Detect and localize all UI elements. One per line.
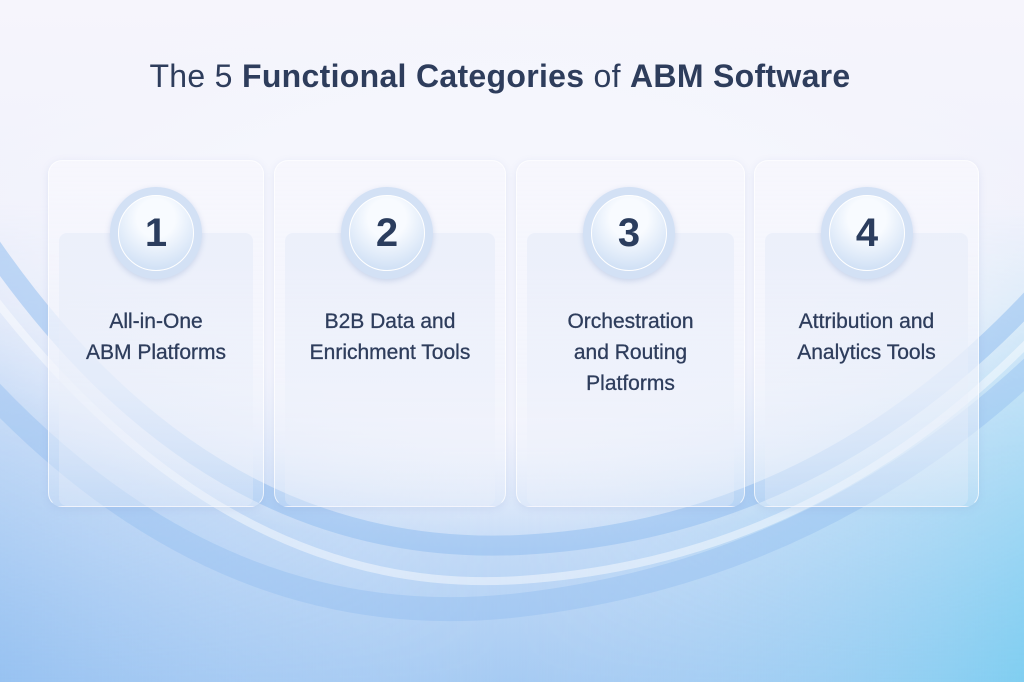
icon: number 3 xyxy=(583,187,675,279)
icon: number 1 xyxy=(110,187,202,279)
text: Attribution xyxy=(797,310,936,364)
text: Attribution: Attribution and xyxy=(799,310,934,333)
text: Orchestration: Orchestration xyxy=(567,310,694,333)
panel: card 2 xyxy=(274,160,506,507)
text: B2B Data: Enrichment Tools xyxy=(310,341,470,364)
icon: number 4: 4 xyxy=(856,211,878,255)
text: B2B Data xyxy=(310,310,470,364)
panel: card 4 xyxy=(754,160,979,507)
icon: number 4 xyxy=(821,187,913,279)
text: Orchestration: Platforms xyxy=(586,372,675,395)
title: The 5 Functional Categories of ABM Software xyxy=(149,58,851,94)
text: All-in-One ABM Platforms: All-in-One xyxy=(109,310,203,333)
text: B2B Data: B2B Data and xyxy=(325,310,455,333)
icon: number 2 xyxy=(341,187,433,279)
icon: number 1: 1 xyxy=(145,211,167,255)
icon: number 2: 2 xyxy=(376,211,398,255)
text: Orchestration: and Routing xyxy=(574,341,687,364)
panel: card 1 xyxy=(48,160,264,507)
icon: number 3: 3 xyxy=(618,211,640,255)
text: Orchestration xyxy=(567,310,694,395)
text: All-in-One ABM Platforms: ABM Platforms xyxy=(86,341,226,364)
text: All-in-One ABM Platforms xyxy=(86,310,226,364)
panel: card 3 xyxy=(516,160,745,507)
text: Attribution: Analytics Tools xyxy=(797,341,936,364)
